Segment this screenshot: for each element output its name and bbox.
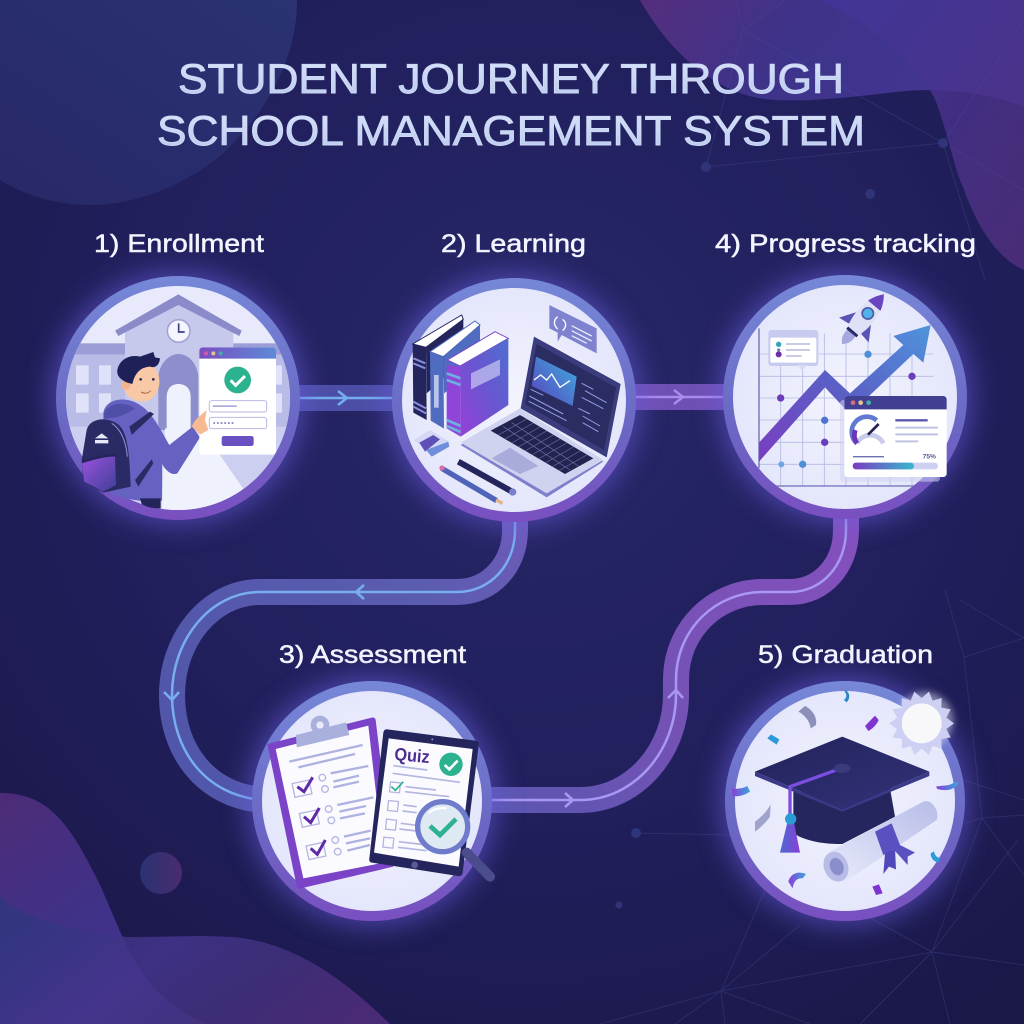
icon: graduation cap: [755, 737, 929, 853]
step 2: learning circle: [386, 272, 642, 528]
title: [157, 55, 865, 154]
icon: eraser: [414, 430, 449, 457]
icon: clipboard: [267, 716, 393, 888]
title: SCHOOL MANAGEMENT SYSTEM: [157, 107, 865, 154]
icon: rocket: [827, 282, 899, 357]
icon: laptop: [461, 337, 621, 497]
step labels: 5) Graduation: [758, 641, 933, 669]
icon: sun: [889, 692, 954, 755]
dashboard card: [840, 396, 947, 482]
icon: pencils: [439, 462, 516, 503]
step labels: 3) Assessment: [279, 641, 466, 669]
line chart: [759, 325, 933, 487]
icon: books: [413, 315, 508, 437]
icon: magnifier: [418, 802, 490, 877]
gauge: [852, 417, 883, 443]
step labels: 4) Progress tracking: [715, 230, 976, 258]
icon: clock: [167, 320, 190, 342]
step labels: 1) Enrollment: [94, 230, 264, 258]
connector: assessment to graduation path: [485, 510, 846, 807]
icon: student with backpack: [82, 352, 200, 508]
icon: speech bubble: [549, 305, 597, 353]
icon: confetti: [732, 690, 958, 895]
step 3: assessment circle: [246, 675, 498, 927]
connector: enrollment to learning: [290, 391, 400, 405]
step labels: 2) Learning: [441, 230, 586, 258]
connector: learning to progress tracking: [625, 390, 735, 404]
step 1: enrollment circle: [50, 270, 306, 526]
icon: diploma: [819, 801, 937, 885]
login window: [192, 347, 276, 455]
step 5: graduation circle: [719, 675, 971, 927]
step 4: progress tracking circle: [717, 269, 973, 525]
title: STUDENT JOURNEY THROUGH: [178, 55, 844, 102]
dashboard card: 75%: [923, 454, 936, 461]
icon: tablet with quiz: Quiz: [394, 744, 431, 767]
step labels: [94, 230, 976, 669]
connector: learning to assessment: [164, 515, 515, 800]
icon: tablet with quiz: [369, 729, 479, 876]
icon: legend bubble: [768, 330, 818, 371]
